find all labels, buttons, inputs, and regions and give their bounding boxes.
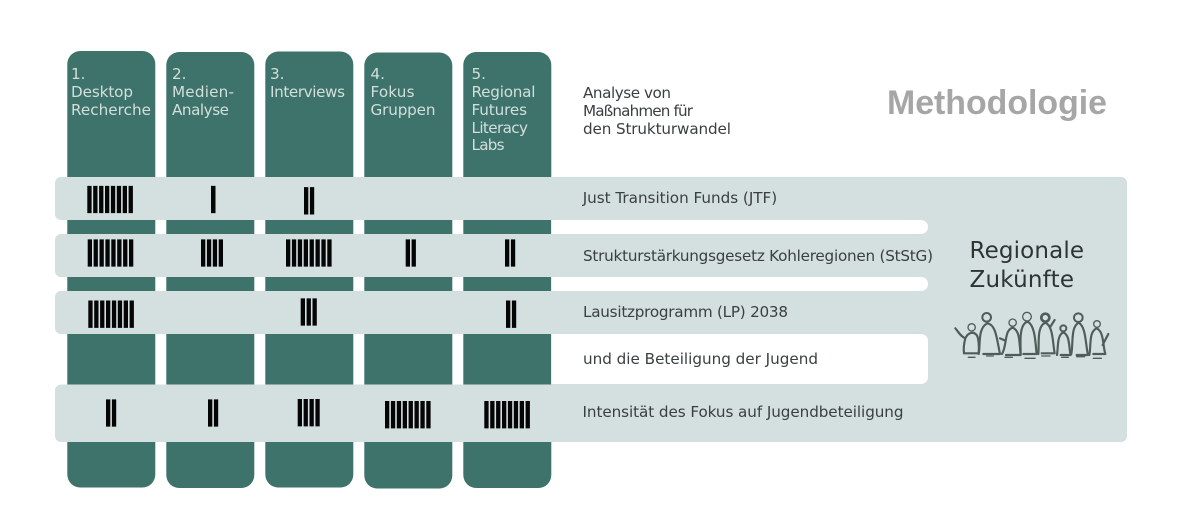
row labels: [582, 189, 933, 421]
row labels: Just Transition Funds (JTF): [582, 189, 777, 207]
column headings: [71, 65, 536, 154]
grey panel with rows: [55, 177, 1127, 442]
Regionale Zukünfte label: Zukünfte: [970, 267, 1074, 293]
column headings: Futures: [472, 101, 527, 119]
column headings: Gruppen: [370, 101, 436, 119]
column headings: 1.: [71, 65, 86, 83]
tally marks: Jugendbeteiligung: [106, 413, 530, 415]
column headings: Interviews: [270, 83, 345, 101]
row labels: und die Beteiligung der Jugend: [583, 350, 818, 368]
column headings: Recherche: [71, 101, 151, 119]
column headings: Medien-: [172, 83, 234, 101]
tally marks: Lausitzprogramm: [88, 312, 517, 314]
column headings: 4.: [370, 65, 385, 83]
column headings: Desktop: [71, 83, 133, 101]
row labels: Intensität des Fokus auf Jugendbeteiligung: [582, 403, 904, 421]
column headings: Regional: [472, 83, 536, 101]
method columns: [67, 51, 551, 488]
column headings: Literacy: [472, 119, 528, 137]
column headings: 5.: [472, 65, 486, 83]
Regionale Zukünfte label: [970, 238, 1084, 293]
tally marks: Just Transition Funds: [87, 200, 315, 201]
white row gaps: [551, 220, 928, 384]
intro text: [583, 84, 731, 138]
column headings: Labs: [472, 136, 505, 154]
title: Methodologie: [887, 84, 1107, 122]
tally marks: Strukturstärkungsgesetz: [88, 239, 516, 267]
column headings: Fokus: [370, 83, 415, 101]
intro text: den Strukturwandel: [583, 120, 731, 138]
Regionale Zukünfte label: Regionale: [970, 238, 1084, 264]
column headings: 2.: [172, 65, 186, 83]
column headings: 3.: [270, 65, 284, 83]
row labels: Lausitzprogramm (LP) 2038: [583, 303, 788, 321]
row labels: Strukturstärkungsgesetz Kohleregionen (StStG): [583, 247, 933, 265]
intro text: Maßnahmen für: [583, 102, 694, 120]
column headings: Analyse: [172, 101, 229, 119]
icon: group of people: [955, 312, 1108, 358]
intro text: Analyse von: [583, 84, 671, 102]
